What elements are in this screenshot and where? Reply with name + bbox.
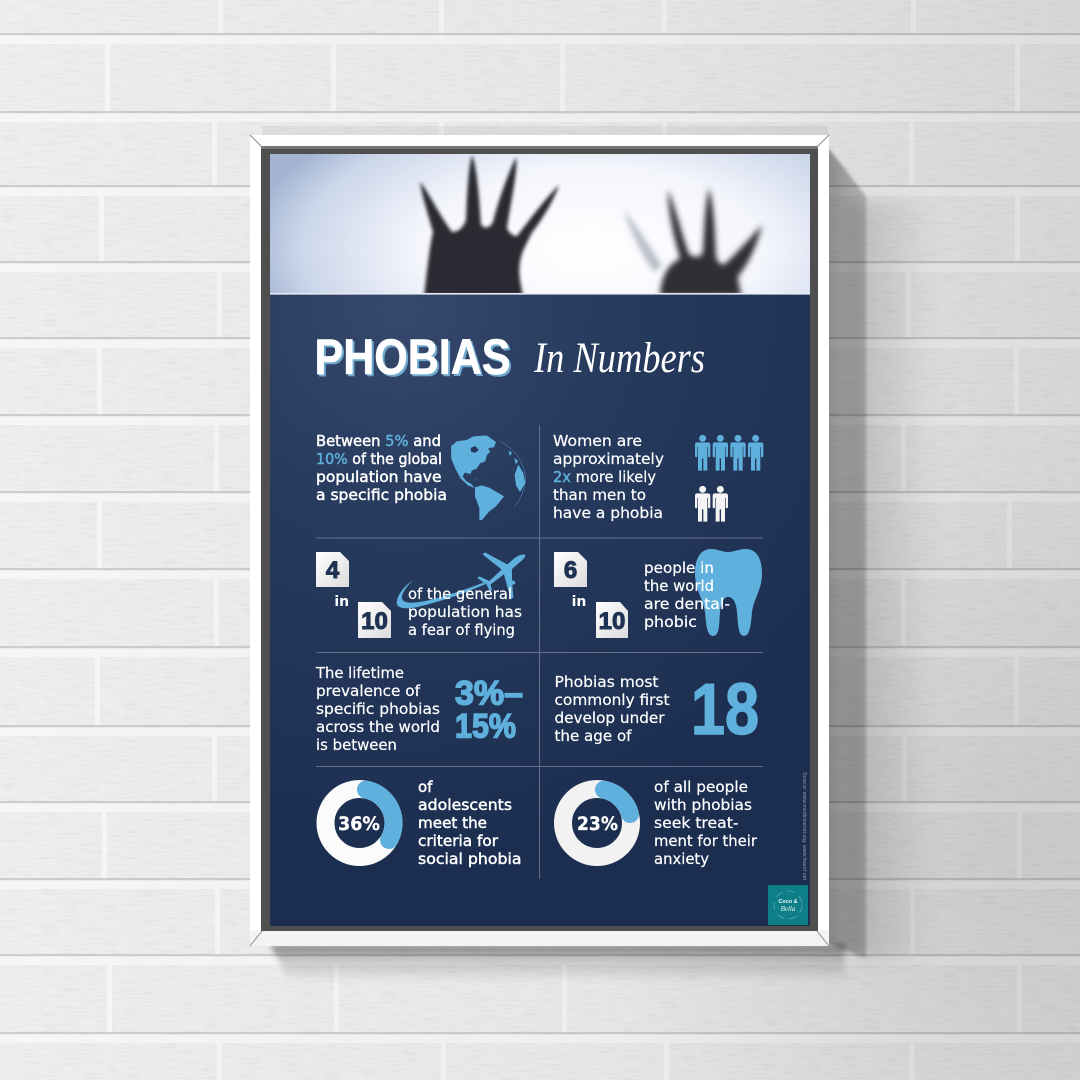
icon: airplane with swoosh — [397, 552, 525, 608]
text: develop under the age of: the age of — [554, 727, 632, 745]
number: 18: 18 — [691, 670, 759, 750]
text: 5% and 10% of the global population: Between 5% and — [316, 432, 441, 450]
panel: adolescents stat — [326, 778, 522, 868]
callout: 6 in 10: 10 — [599, 608, 625, 635]
poster navy panel — [270, 293, 810, 926]
text: lifetime prevalence: across the world — [316, 718, 440, 736]
icon: globe — [451, 435, 525, 520]
text: lifetime prevalence: prevalence of — [316, 682, 421, 700]
text: women 2x more likely: than men to — [553, 486, 646, 504]
text: women 2x more likely: 2x more likely — [553, 468, 656, 486]
logo: Coco &amp; Bella: Coco & — [778, 899, 798, 905]
chart: 23% donut: 23% — [577, 813, 618, 835]
text: adolescents social phobia: adolescents — [418, 796, 512, 814]
poster photo: shadow hands behind frosted glass — [270, 154, 810, 296]
text: adolescents social phobia: of — [418, 778, 433, 796]
text: develop under the age of: Phobias most — [554, 673, 659, 691]
title: PHOBIAS: PHOBIAS — [316, 331, 512, 387]
chart: 36% donut: 36% — [338, 813, 380, 835]
panel: lifetime prevalence stat — [315, 664, 523, 754]
text: 5% and 10% of the global population: a specific phobia — [316, 486, 447, 504]
text: 5% and 10% of the global population: 10% of the global — [316, 450, 442, 468]
panel: fear of flying stat — [316, 552, 525, 639]
text: fear of flying: a fear of flying — [408, 621, 515, 639]
panel: age of onset stat — [554, 670, 759, 750]
text: seek treatment — [654, 778, 758, 868]
frame shadow — [262, 126, 935, 982]
text: adolescents social phobia — [418, 778, 522, 868]
title: In Numbers: In Numbers — [533, 335, 705, 382]
panel: global population stat — [316, 432, 525, 520]
icon: tooth — [695, 549, 762, 636]
icon: right hand silhouette — [624, 188, 762, 296]
callout: 4 in 10: 4 — [326, 557, 340, 584]
title: PHOBIAS: PHOBIAS — [314, 329, 510, 385]
callout: 6 in 10: in — [572, 594, 586, 610]
chart: 23% donut — [563, 789, 631, 857]
text: seek treatment: anxiety — [654, 850, 709, 868]
logo: Coco &amp; Bella — [768, 885, 808, 925]
logo: Coco &amp; Bella: Bella — [781, 905, 796, 913]
text: seek treatment: seek treat- — [654, 814, 738, 832]
text: women 2x more likely: approximately — [553, 450, 664, 468]
text: dental-phobic — [644, 559, 730, 631]
text: lifetime prevalence: The lifetime — [315, 664, 404, 682]
icon: left hand silhouette — [420, 155, 559, 296]
source note: Source: www.medicinenet.org, www.fearof.net — [801, 772, 807, 881]
text: women 2x more likely: Women are — [553, 432, 642, 450]
text: fear of flying — [408, 585, 522, 639]
icon: two men figures — [695, 486, 728, 522]
text: dental-phobic: are dental- — [644, 595, 730, 613]
text: 5% and 10% of the global population: population have — [316, 468, 442, 486]
panel: treatment stat — [563, 778, 758, 868]
callout: 4 in 10: in — [334, 594, 349, 610]
chart: 36% donut — [326, 789, 394, 857]
text: adolescents social phobia: social phobia — [418, 850, 522, 868]
callout: 4 in 10: 10 — [361, 608, 388, 635]
text: fear of flying: of the general — [408, 585, 512, 603]
panel: women vs men stat — [553, 432, 763, 522]
grid lines — [316, 425, 763, 879]
text: seek treatment: of all people — [654, 778, 748, 796]
text: seek treatment: with phobias — [654, 796, 752, 814]
callout: 6 in 10: 6 — [564, 557, 577, 584]
number: 3%–15%: 15% — [455, 708, 516, 746]
text: women 2x more likely — [553, 432, 664, 522]
text: dental-phobic: phobic — [644, 613, 697, 631]
callout: 6 in 10 — [554, 552, 628, 638]
text: develop under the age of: commonly first — [554, 691, 670, 709]
text: adolescents social phobia: criteria for — [418, 832, 499, 850]
text: develop under the age of — [554, 673, 670, 745]
number: 3%–15% — [455, 674, 523, 746]
text: seek treatment: ment for their — [654, 832, 758, 850]
callout: 4 in 10 — [316, 552, 391, 638]
text: dental-phobic: the world — [644, 577, 714, 595]
text: lifetime prevalence: specific phobias — [316, 700, 440, 718]
text: develop under the age of: develop under — [554, 709, 665, 727]
text: lifetime prevalence: is between — [316, 736, 397, 754]
text: lifetime prevalence — [315, 664, 440, 754]
icon: four women figures — [695, 435, 763, 471]
text: dental-phobic: people in — [644, 559, 714, 577]
text: women 2x more likely: have a phobia — [553, 504, 663, 522]
panel: dental phobia stat — [554, 549, 762, 638]
text: 5% and 10% of the global population — [316, 432, 447, 504]
poster frame — [250, 135, 829, 946]
number: 3%–15%: 3%– — [455, 674, 523, 712]
text: adolescents social phobia: meet the — [418, 814, 487, 832]
text: fear of flying: population has — [408, 603, 522, 621]
